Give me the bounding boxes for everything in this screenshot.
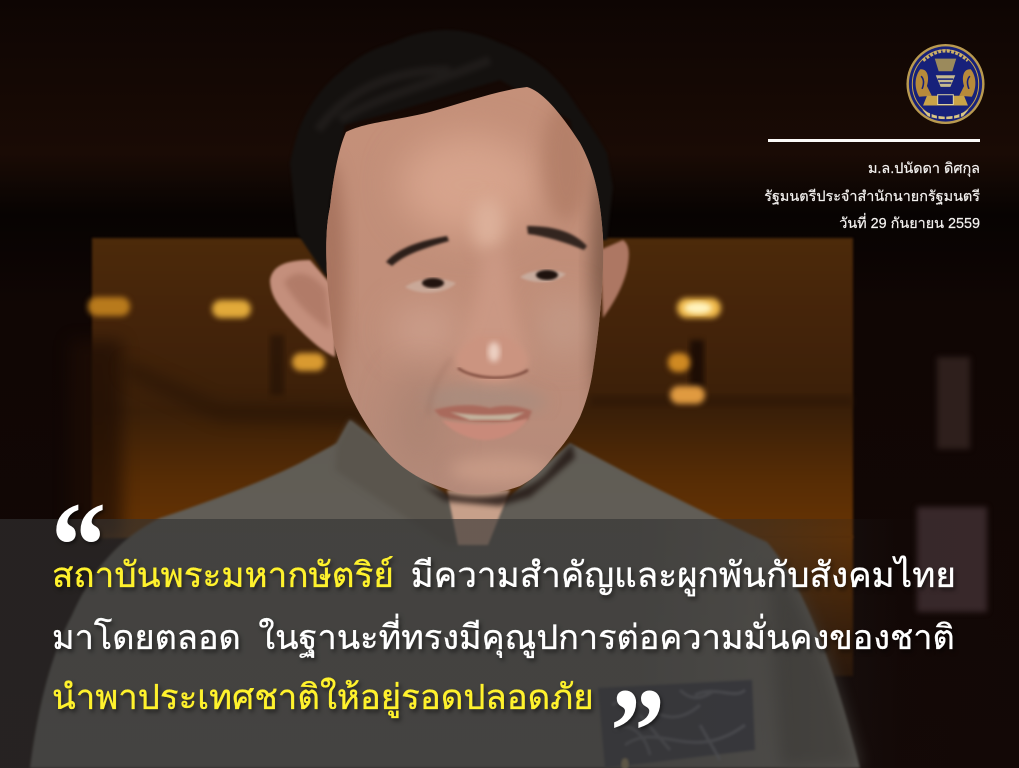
nose [457, 250, 528, 381]
pocket square [598, 680, 755, 768]
hair [290, 30, 613, 278]
quote line 1: สถาบันพระมหากษัตริย์ มีความสำคัญและผูกพันกับสังคมไทย [52, 556, 956, 595]
logo: Secretariat of the Prime Minister seal [906, 44, 985, 124]
quote line 2: มาโดยตลอด ในฐานะที่ทรงมีคุณูปการต่อความมั่นคงของชาติ [52, 619, 955, 657]
moustache [439, 386, 540, 408]
eyebrows [386, 236, 449, 266]
suit jacket [30, 420, 860, 768]
quote line 3: นำพาประเทศชาติให้อยู่รอดปลอดภัย [52, 678, 594, 717]
eyes [405, 279, 456, 293]
lamps [88, 297, 721, 404]
caption: speaker name, title and date [764, 161, 980, 232]
side room details [937, 357, 970, 449]
face [326, 87, 604, 493]
back wall [92, 238, 853, 538]
ear: left [270, 260, 336, 357]
cheek folds [428, 358, 452, 415]
neck V [447, 490, 510, 545]
mouth [434, 405, 532, 422]
caption: speaker name, title and date: รัฐมนตรีประจำสำนักนายกรัฐมนตรี [764, 188, 980, 204]
divider rule [768, 139, 980, 142]
caption: speaker name, title and date: ม.ล.ปนัดดา ดิศกุล [868, 161, 980, 177]
caption: speaker name, title and date: วันที่ 29 กันยายน 2559 [839, 216, 980, 232]
icon: opening quotation mark: “ [51, 477, 106, 614]
caption band: translucent overlay fading to the right [0, 519, 1019, 768]
ear: right [600, 240, 629, 318]
